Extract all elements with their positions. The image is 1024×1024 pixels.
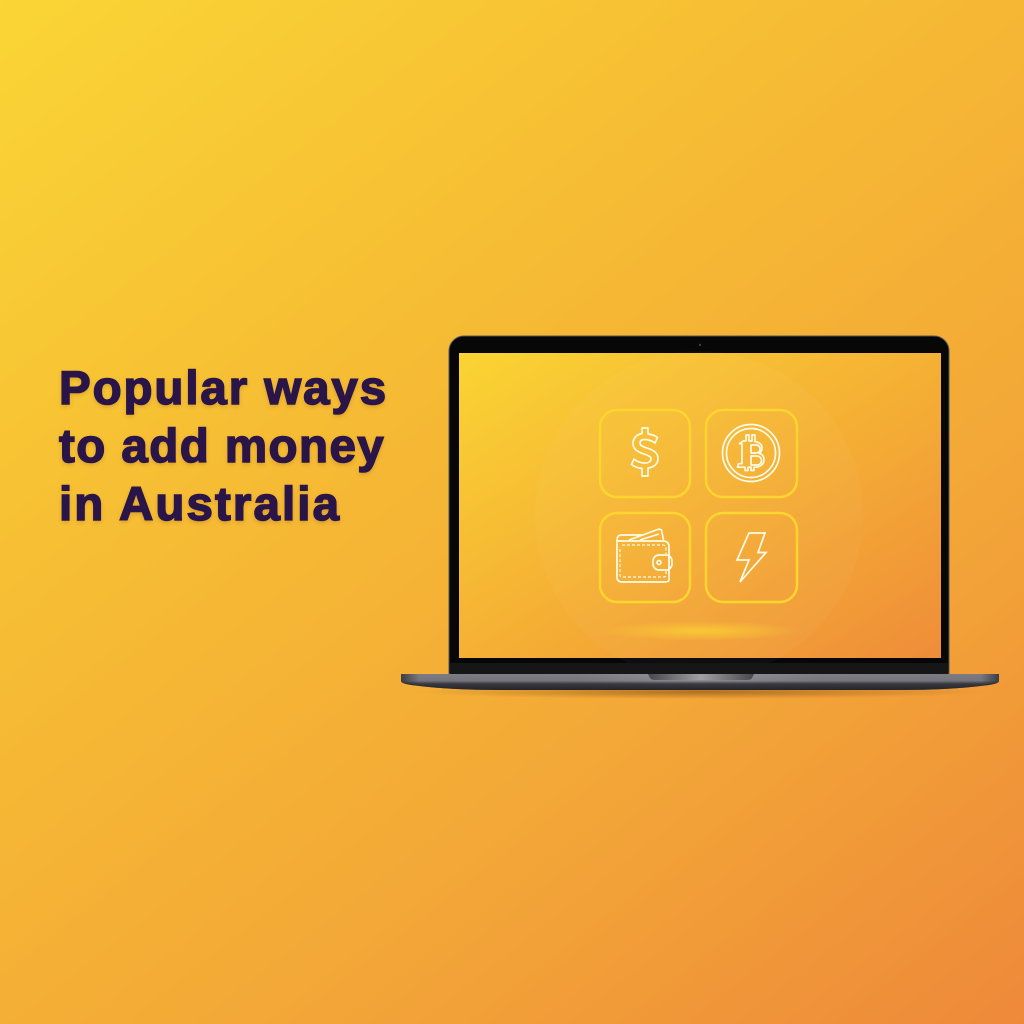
screen halo — [535, 351, 863, 679]
trackpad notch — [648, 674, 754, 680]
laptop base — [401, 674, 999, 690]
title: in Australia — [59, 478, 341, 531]
icon: bitcoin coin — [722, 424, 780, 482]
lower bezel — [450, 663, 948, 674]
title: to add money — [59, 420, 385, 473]
title — [58, 362, 388, 531]
camera — [699, 344, 701, 346]
title: Popular ways — [59, 362, 388, 415]
icon: wallet — [617, 529, 672, 582]
screen glow — [602, 621, 802, 641]
tile: dollar — [600, 410, 690, 497]
tile: wallet — [600, 513, 690, 602]
icon: lightning bolt — [737, 533, 766, 582]
tile: bitcoin — [706, 410, 797, 497]
tile: lightning — [706, 513, 797, 602]
laptop shadow — [415, 685, 985, 699]
laptop lid — [449, 336, 949, 679]
screen — [459, 353, 941, 658]
icon: dollar sign — [632, 428, 658, 476]
